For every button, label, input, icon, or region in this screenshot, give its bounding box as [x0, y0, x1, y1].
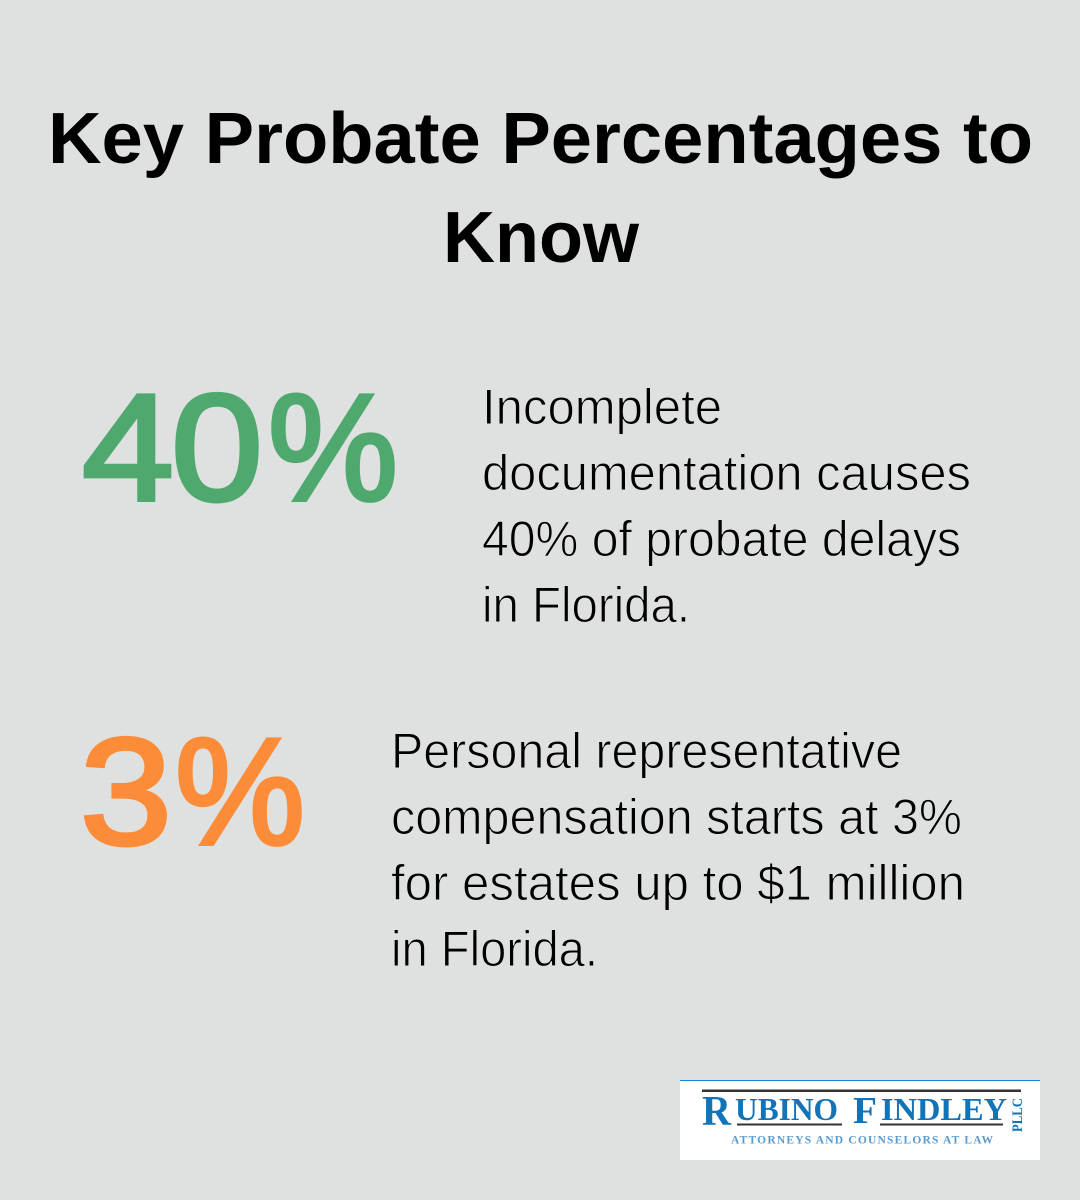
title: Key Probate Percentages to — [48, 99, 1033, 179]
title — [48, 99, 1033, 278]
stat: 40% — [82, 363, 398, 533]
text block: representative compensation: compensation starts at 3% — [391, 789, 962, 845]
title: Know — [443, 198, 640, 278]
stat: 40%: % — [268, 363, 398, 533]
stat: 3%: % — [175, 707, 305, 877]
stat: 40%: 4 — [82, 363, 174, 533]
text block: representative compensation: for estates up to $1 million — [391, 855, 965, 911]
logo: Rubino Findley — [680, 1080, 1040, 1160]
logo: Rubino Findley: PLLC — [1010, 1098, 1026, 1132]
text block: documentation delays: Incomplete — [482, 379, 722, 435]
text block: representative compensation: in Florida. — [391, 921, 598, 977]
text block: documentation delays — [482, 379, 971, 633]
text block: representative compensation — [391, 723, 965, 977]
text block: representative compensation: Personal representative — [391, 723, 902, 779]
logo: Rubino Findley: ATTORNEYS AND COUNSELORS AT LAW — [731, 1134, 994, 1146]
logo: Rubino Findley: INDLEY — [881, 1091, 1007, 1127]
stat: 40%: 0 — [171, 363, 263, 533]
stat: 3%: 3 — [80, 707, 172, 877]
stat: 3% — [80, 707, 305, 877]
logo: Rubino Findley: UBINO — [735, 1091, 838, 1127]
text block: documentation delays: documentation causes — [482, 445, 971, 501]
text block: documentation delays: in Florida. — [482, 577, 690, 633]
logo: Rubino Findley: F — [853, 1090, 877, 1132]
logo: Rubino Findley: R — [702, 1089, 732, 1135]
text block: documentation delays: 40% of probate delays — [482, 511, 961, 567]
